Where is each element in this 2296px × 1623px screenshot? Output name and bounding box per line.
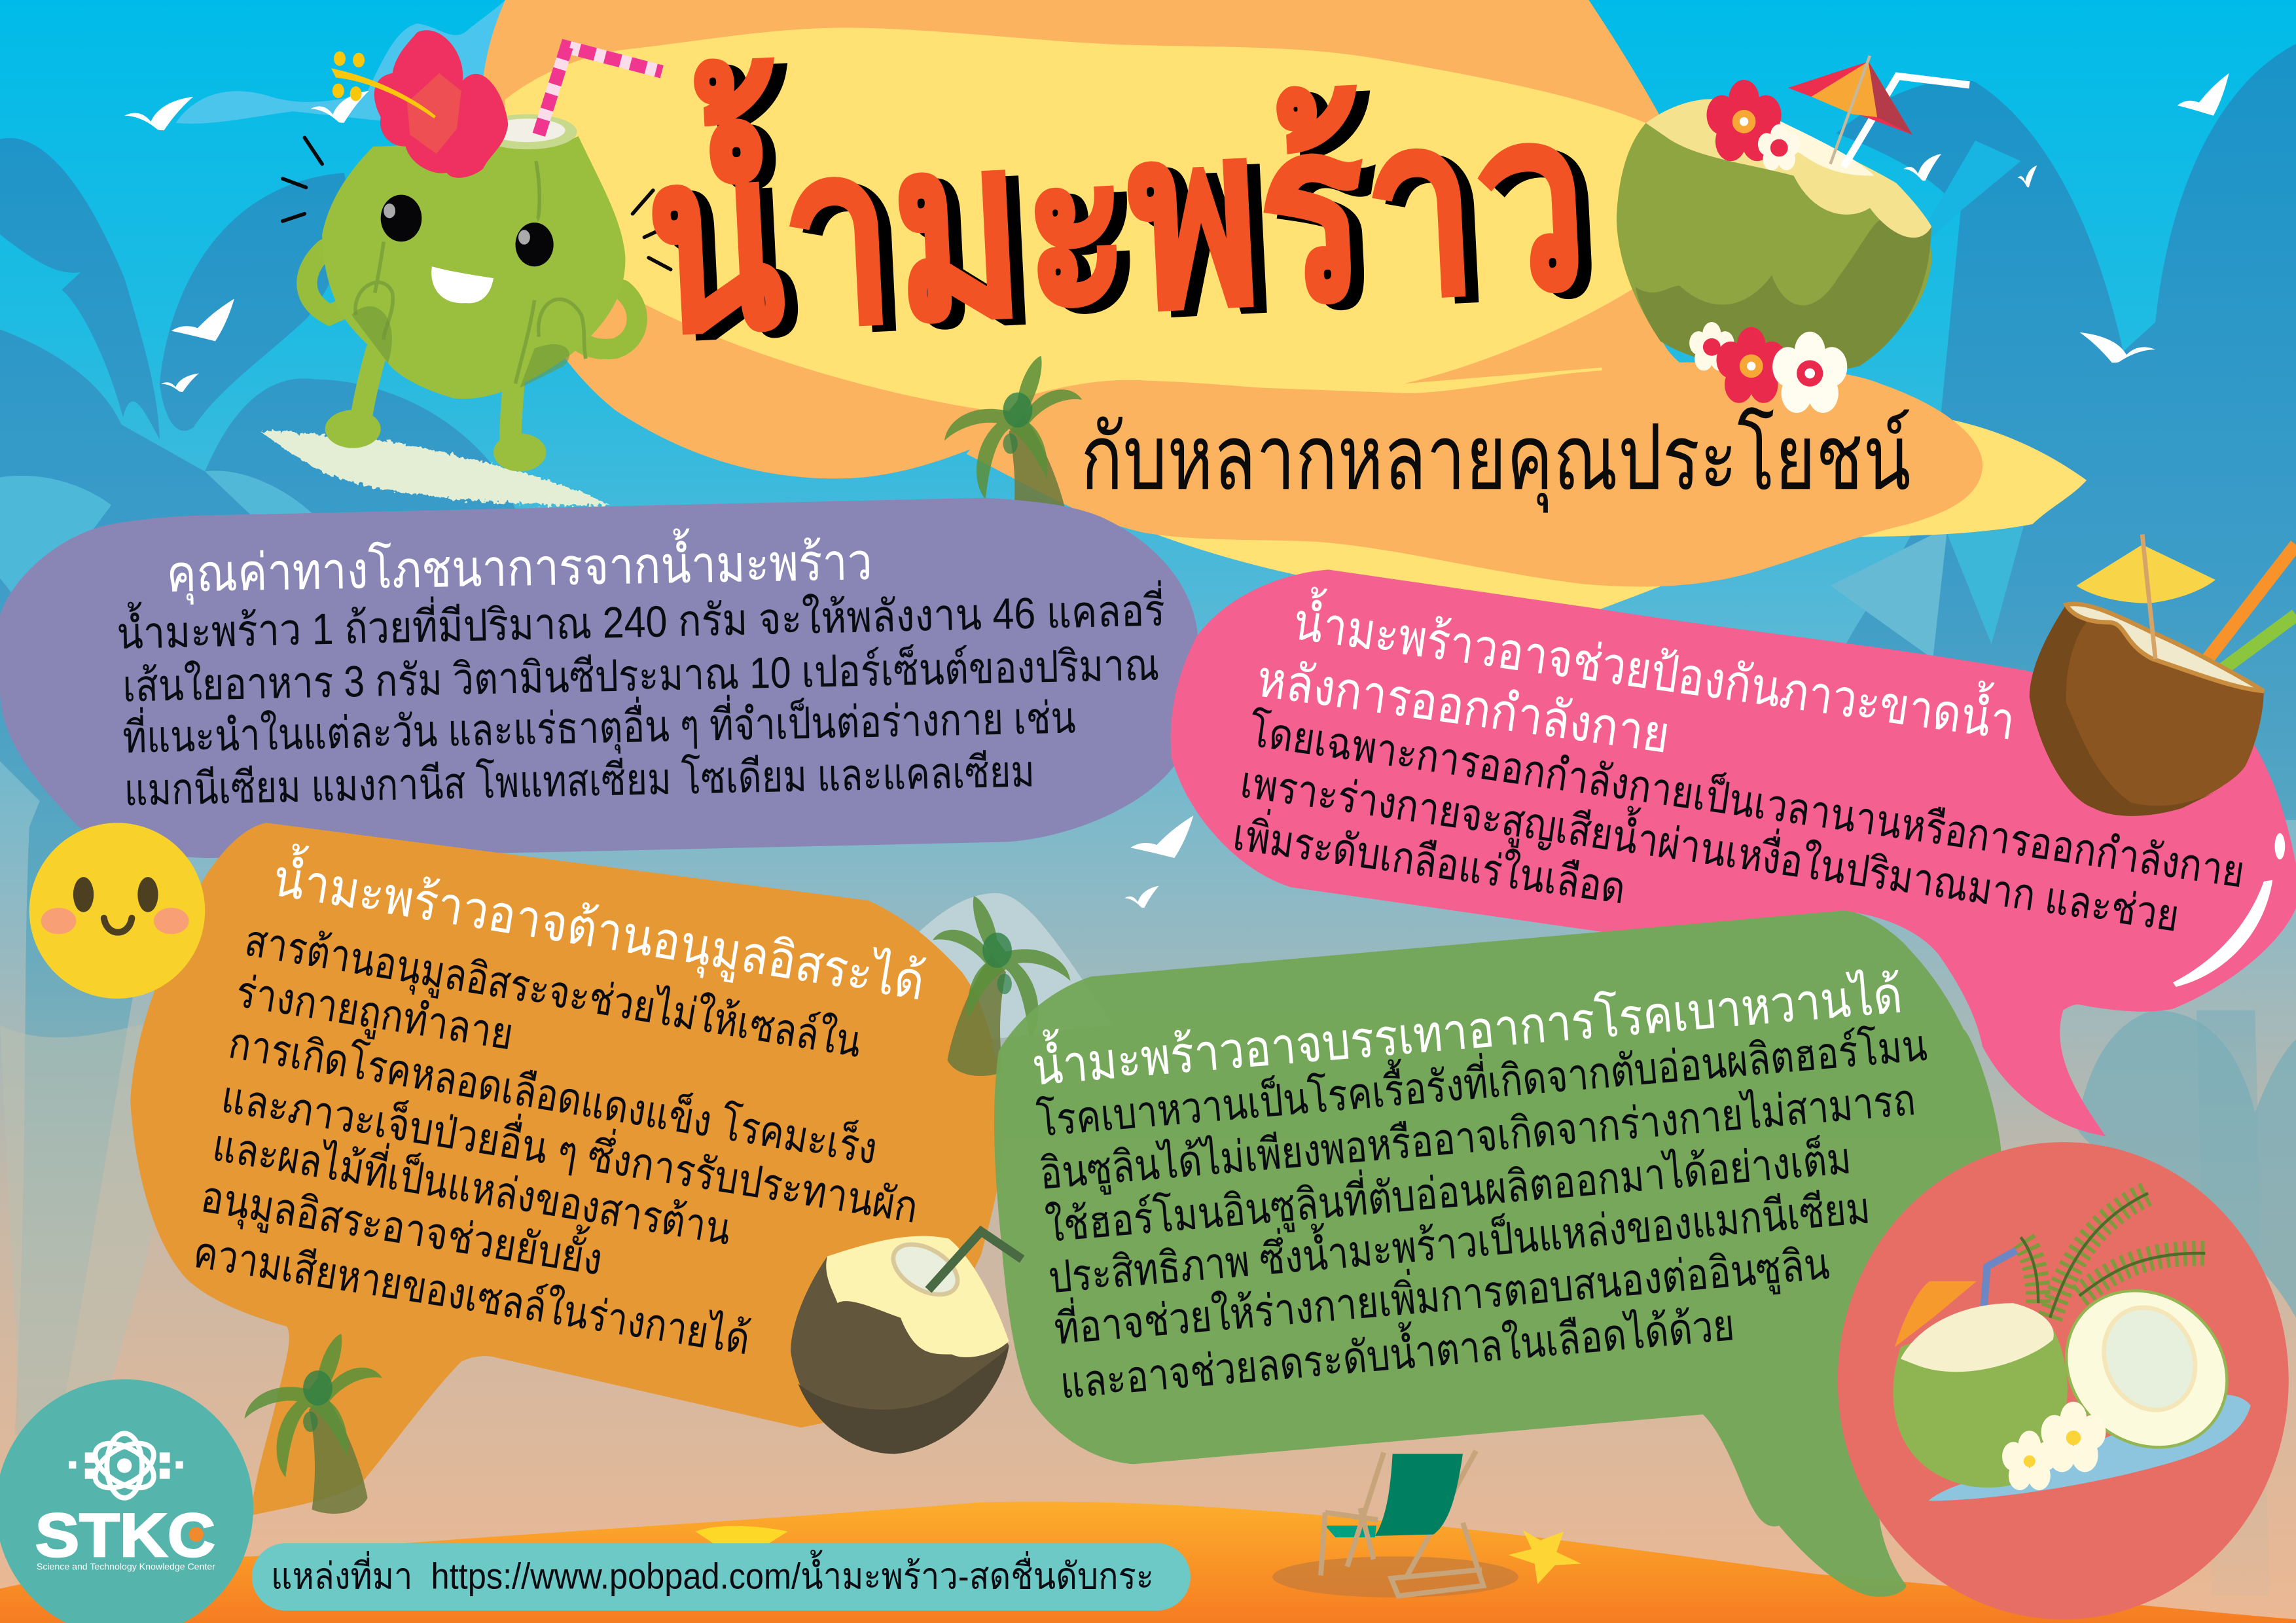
logo wordmark: STKC (35, 1501, 215, 1569)
body text: และภาวะเจ็บป่วยอื่น ๆ ซึ่งการรับประทานผัก (218, 1067, 922, 1232)
body text: ที่อาจช่วยให้ร่างกายเพิ่มการตอบสนองต่ออินซูลิน (1052, 1233, 1831, 1356)
eyes (73, 877, 158, 912)
palm leaves (2020, 1193, 2205, 1318)
body text: ใช้ฮอร์โมนอินซูลินที่ตับอ่อนผลิตออกมาได้อย่างเต็ม (1043, 1128, 1854, 1253)
body text: อนุมูลอิสระอาจช่วยยับยั้ง (197, 1164, 607, 1287)
body text (1034, 1013, 1929, 1408)
stamen (332, 51, 435, 117)
birds (124, 73, 2229, 908)
sand (0, 1501, 2296, 1623)
beach chair (1272, 1451, 1518, 1597)
logo accent dot (189, 1527, 204, 1542)
cup opening (477, 115, 577, 149)
right palm silhouette (1804, 44, 2296, 1596)
red circle with coconuts (1838, 1142, 2289, 1619)
logo tagline: Science and Technology Knowledge Center (37, 1561, 215, 1571)
panel: antioxidants (130, 823, 1003, 1516)
header sun blob: outer orange (482, 0, 1684, 478)
arms (307, 249, 637, 349)
heading: น้ำมะพร้าวอาจช่วยป้องกันภาวะขาดน้ำ (1290, 584, 2020, 751)
panel: dehydration (1171, 569, 2296, 1136)
top-left small palm (944, 356, 1082, 536)
straw (928, 1232, 1022, 1290)
heading: น้ำมะพร้าวอาจต้านอนุมูลอิสระได้ (269, 841, 930, 1014)
source pill (252, 1543, 1191, 1611)
body text: และอาจช่วยลดระดับน้ำตาลในเลือดได้ด้วย (1058, 1293, 1736, 1408)
background clouds and mountains (175, 0, 1113, 1054)
logo icon (88, 1433, 161, 1498)
body text: ประสิทธิภาพ ซึ่งน้ำมะพร้าวเป็นแหล่งของแมกนีเซียม (1046, 1175, 1872, 1302)
white straw (1844, 76, 1969, 167)
half coconut (2034, 1258, 2259, 1480)
plumeria flowers (2002, 1402, 2106, 1490)
yellow starfish on sand (696, 1526, 788, 1546)
coconut top (1901, 1303, 2054, 1372)
body text: ความเสียหายของเซลล์ในร่างกายได้ (190, 1227, 753, 1364)
highlights (2173, 833, 2285, 987)
middle small palm (933, 896, 1070, 1076)
body text (116, 578, 1166, 815)
hibiscus flower (374, 30, 508, 178)
subtitle yellow tail (996, 420, 2087, 609)
heading: คุณค่าทางโภชนาการจากน้ำมะพร้าว (166, 525, 873, 605)
straw (539, 47, 662, 135)
umbrella (1895, 1281, 1977, 1347)
brown coconut with umbrella and straws (2030, 535, 2296, 816)
body text: สารต้านอนุมูลอิสระจะช่วยไม่ให้เซลล์ใน (241, 916, 865, 1069)
smiley sun (29, 823, 205, 999)
body (322, 134, 625, 399)
panel: diabetes (994, 911, 2001, 1597)
logo: STKC (0, 1380, 253, 1623)
opening (885, 1234, 966, 1305)
shell (2030, 605, 2264, 816)
panel: nutritional value (0, 498, 1198, 858)
main title: น้ำมะพร้าว (639, 17, 1593, 384)
legs (360, 351, 514, 446)
flesh (826, 1236, 1009, 1357)
main title: น้ำมะพร้าว (652, 23, 1606, 390)
cheeks (41, 908, 189, 934)
body text: ที่แนะนำในแต่ละวัน และแร่ธาตุอื่น ๆ ที่จำเป็นต่อร่างกาย เช่น (122, 688, 1076, 764)
body text: อินซูลินได้ไม่เพียงพอหรืออาจเกิดจากร่างกายไม่สามารถ (1038, 1075, 1918, 1201)
coconut shell (1617, 99, 1931, 374)
body text: โรคเบาหวานเป็นโรคเรื้อรังที่เกิดจากตับอ่อนผลิตฮอร์โมน (1034, 1013, 1929, 1146)
body text: และผลไม้ที่เป็นแหล่งของสารต้าน (209, 1115, 736, 1255)
smile (104, 918, 132, 933)
surfboard (259, 431, 611, 505)
straws (2201, 544, 2296, 673)
body text: เพิ่มระดับเกลือแร่ในเลือด (1230, 804, 1629, 914)
flesh (2066, 604, 2264, 691)
left palm silhouette (0, 138, 556, 1464)
mouth (431, 266, 493, 303)
cocktail umbrella (1788, 56, 1912, 164)
shell shadow (1636, 220, 1931, 373)
bottom-left small palm (245, 1334, 382, 1514)
subtitle orange banner (967, 363, 1982, 586)
right coconut with umbrella (1617, 56, 1969, 413)
green coconut (1893, 1318, 2068, 1488)
header inner yellow blob (505, 27, 1670, 412)
heading: หลังการออกกำลังกาย (1253, 649, 1673, 764)
body text: การเกิดโรคหลอดเลือดแดงแข็ง โรคมะเร็ง (225, 1016, 881, 1173)
straw (1982, 1251, 2017, 1325)
motion marks (283, 137, 671, 270)
flowers (1689, 80, 1847, 413)
body text: ร่างกายถูกทำลาย (232, 967, 516, 1061)
coconut flesh (1646, 99, 1931, 238)
body text: น้ำมะพร้าว 1 ถ้วยที่มีปริมาณ 240 กรัม จะให้พลังงาน 46 แคลอรี่ (116, 578, 1166, 658)
yellow umbrella (2076, 535, 2215, 659)
body text: แมกนีเซียม แมงกานีส โพแทสเซียม โซเดียม และแคลเซียม (124, 746, 1035, 815)
mascot: coconut surfer (259, 30, 671, 505)
puddle (1928, 1395, 2251, 1501)
dark coconut with straw (791, 1232, 1022, 1454)
heading: น้ำมะพร้าวอาจบรรเทาอาการโรคเบาหวานได้ (1030, 958, 1905, 1096)
source text: แหล่งที่มา https://www.pobpad.com/น้ำมะพร้าว-สดชื่นดับกระ (271, 1550, 1154, 1596)
eyes (381, 195, 554, 266)
shading and fists (355, 161, 586, 383)
body text: เส้นใยอาหาร 3 กรัม วิตามินซีประมาณ 10 เปอร์เซ็นต์ของปริมาณ (122, 639, 1160, 711)
body text (190, 916, 922, 1364)
starfish (1508, 1530, 1581, 1584)
subtitle: กับหลากหลายคุณประโยชน์ (1081, 407, 1911, 513)
feet (325, 410, 546, 471)
shell (791, 1255, 1009, 1454)
